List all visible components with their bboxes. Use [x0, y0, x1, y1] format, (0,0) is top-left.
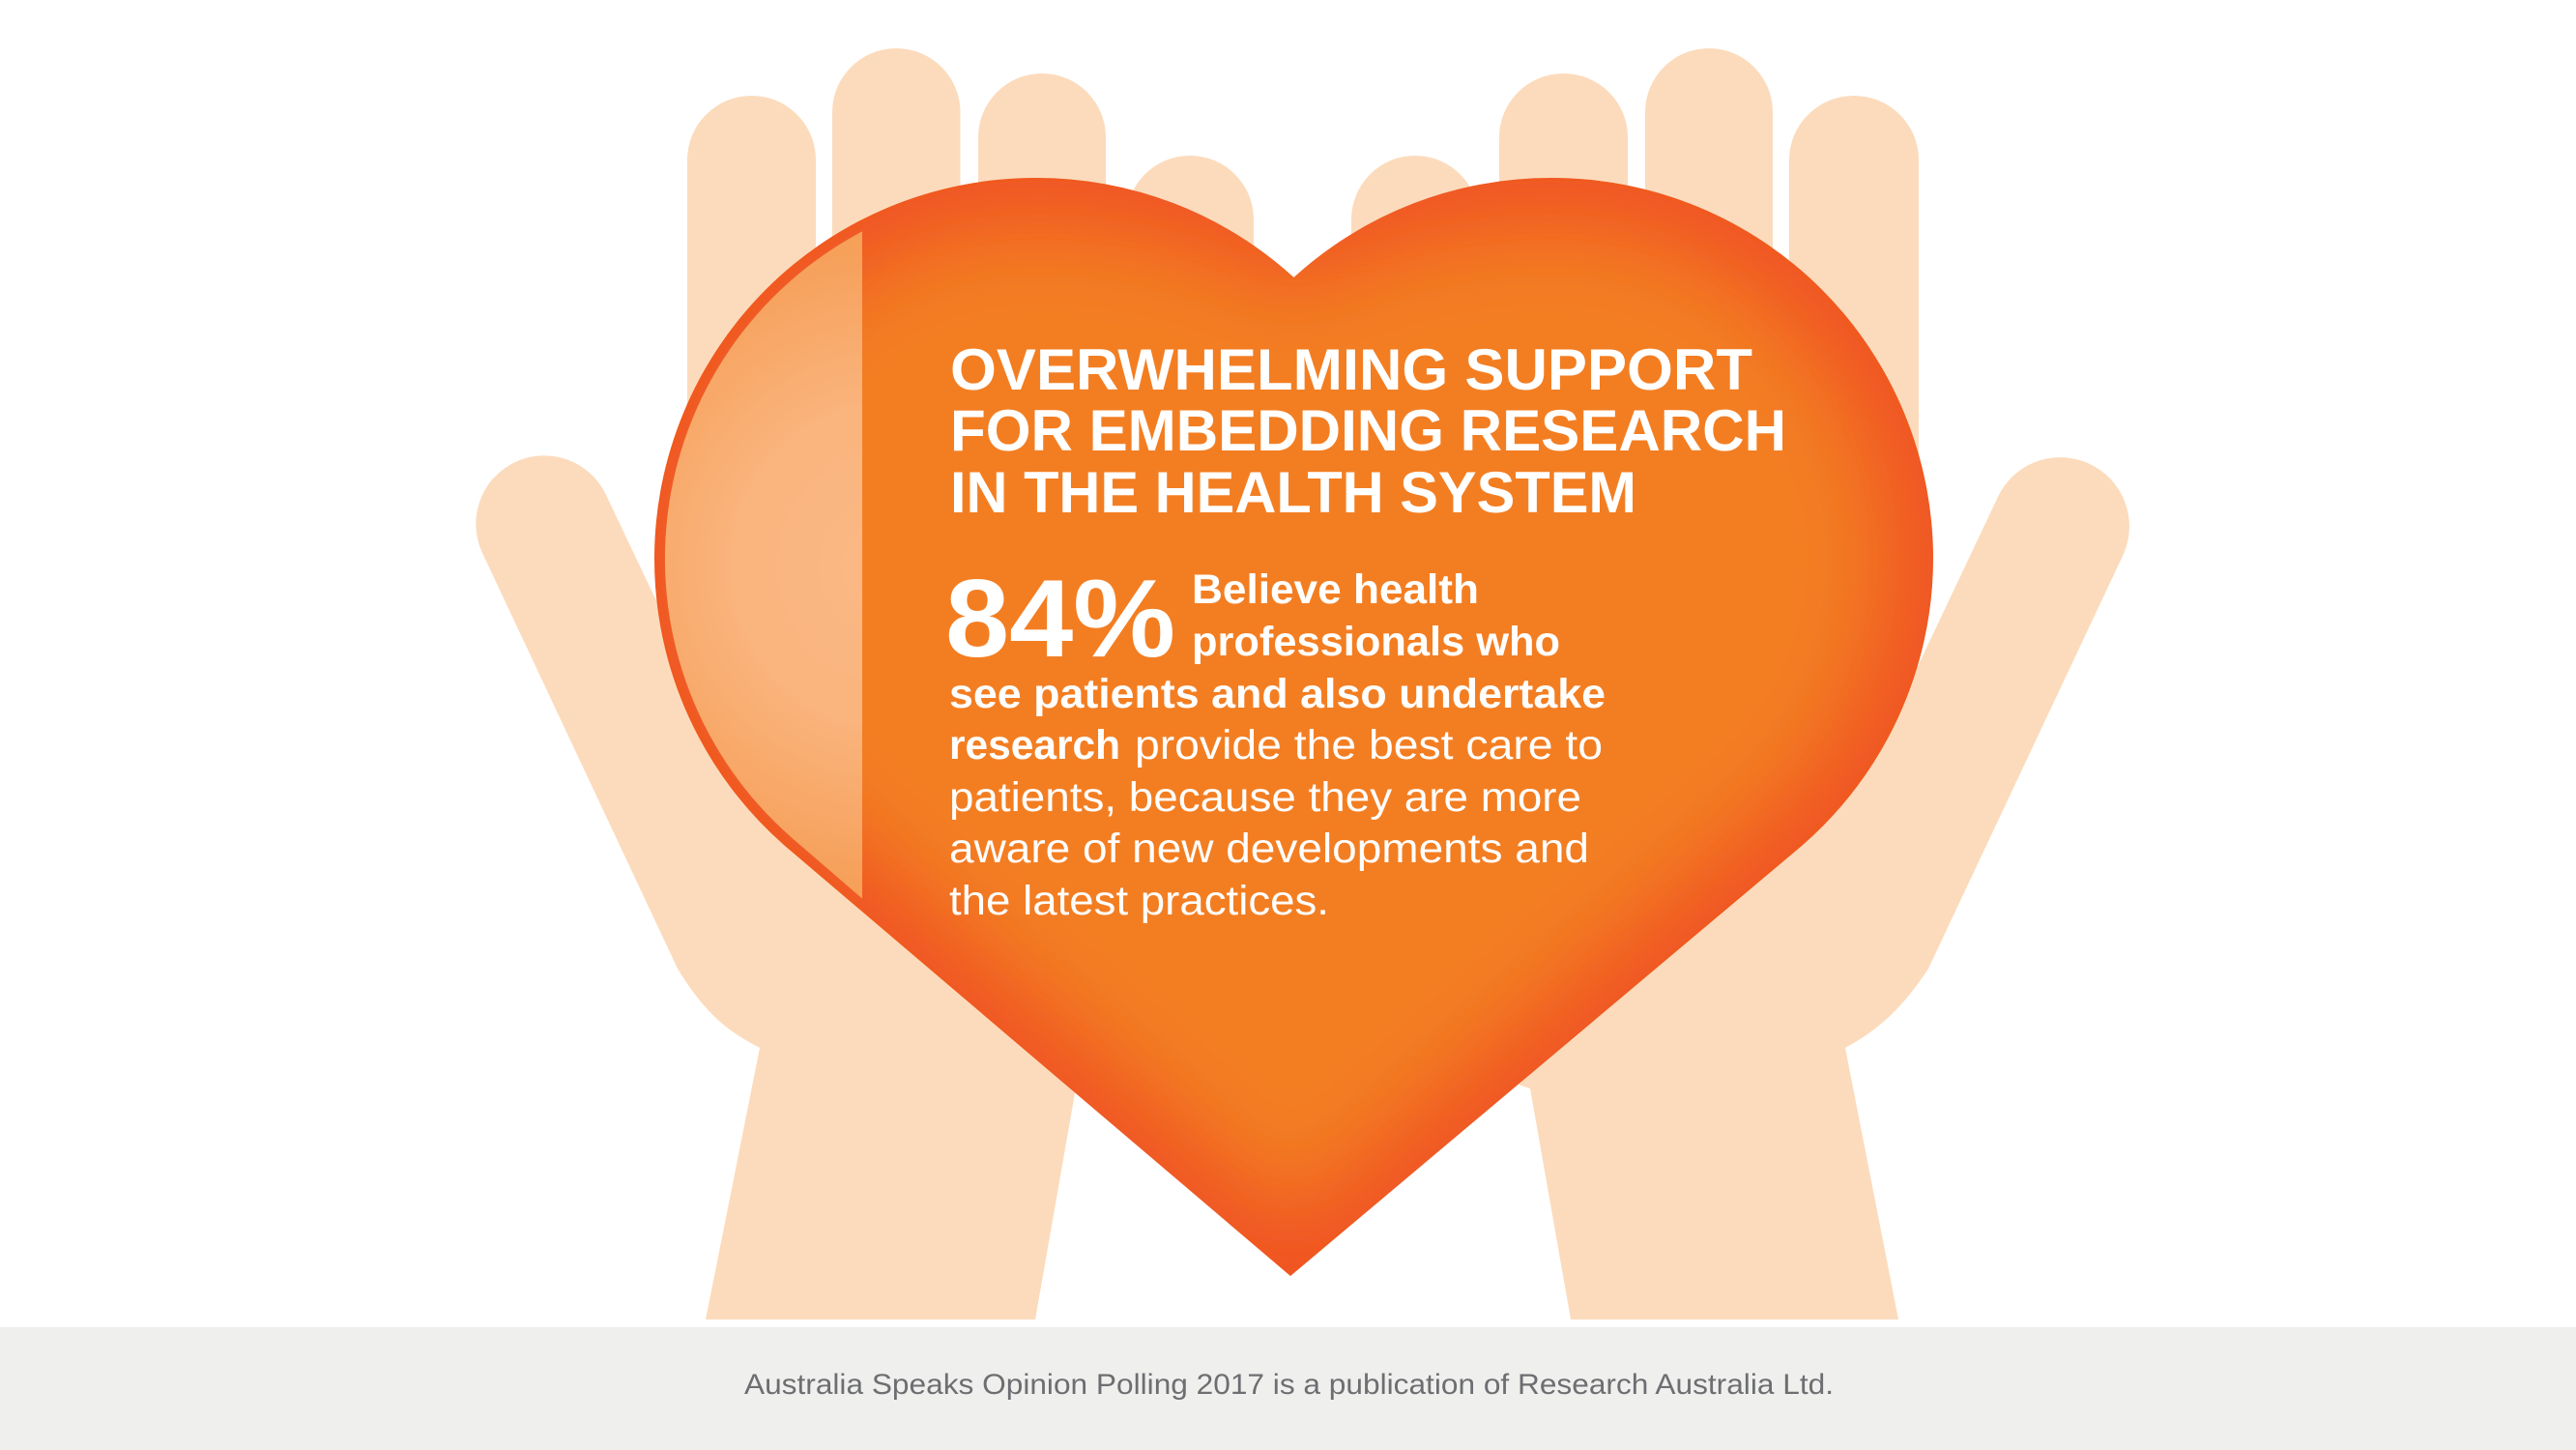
body paragraph: patients, because they are more: [949, 774, 1581, 821]
body paragraph: aware of new developments and: [949, 826, 1589, 872]
title: FOR EMBEDDING RESEARCH: [950, 398, 1786, 463]
body paragraph: see patients and also undertake: [949, 671, 1606, 717]
footer bar: [0, 1327, 2576, 1450]
right hand: index finger: [1351, 156, 1479, 309]
body paragraph: provide the best care to: [1135, 722, 1603, 768]
heart base in red-orange: [654, 178, 1933, 1276]
left hand: [476, 48, 1254, 1320]
right hand: ring finger: [1645, 48, 1773, 387]
body paragraph: [949, 566, 1606, 924]
body paragraph: the latest practices.: [949, 878, 1329, 924]
right hand: middle finger: [1499, 73, 1628, 309]
title: OVERWHELMING SUPPORT: [950, 337, 1752, 402]
left hand: middle finger: [978, 73, 1106, 309]
title: IN THE HEALTH SYSTEM: [950, 460, 1636, 525]
heart inner orange glow: [703, 226, 1885, 1220]
body paragraph: professionals who: [1192, 619, 1560, 665]
body paragraph: research: [949, 722, 1120, 768]
left hand: little finger: [687, 96, 816, 483]
left hand: ring finger: [832, 48, 961, 387]
statistic: 84%: 84%: [945, 558, 1175, 681]
heart: [654, 178, 1933, 1276]
title: [950, 337, 1786, 525]
right hand: thumb, palm and wrist: [1519, 457, 2129, 1320]
left hand: thumb, palm and wrist: [476, 455, 1075, 1320]
footer credit text: Australia Speaks Opinion Polling 2017 is a publication of Research Australia Ltd.: [744, 1369, 1834, 1401]
heart left highlight panel: [665, 231, 862, 899]
right hand: little finger: [1789, 96, 1919, 483]
right hand: [1351, 48, 2129, 1320]
left hand: index finger: [1126, 156, 1254, 309]
body paragraph: Believe health: [1192, 566, 1479, 613]
